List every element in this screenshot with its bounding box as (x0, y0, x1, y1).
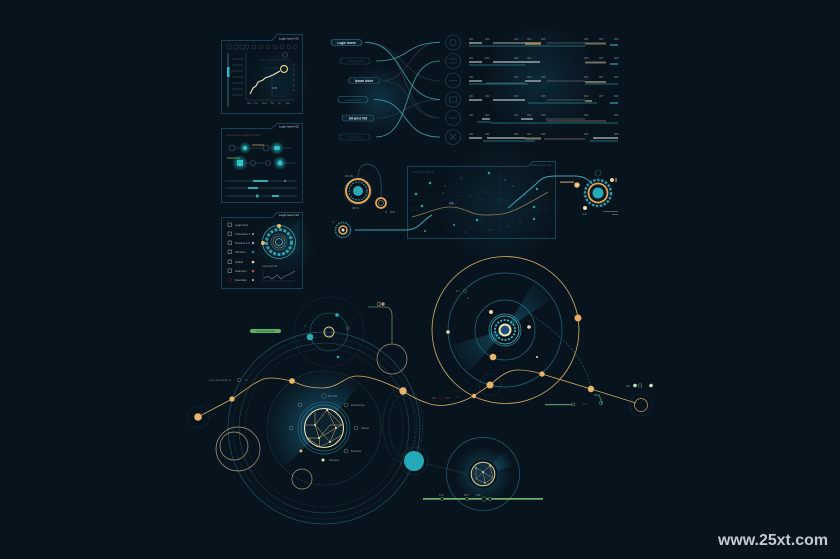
route nodes (194, 371, 594, 421)
circles: lower left (216, 427, 260, 471)
gantt labels: 002 (485, 37, 490, 41)
gantt labels (469, 37, 619, 136)
dashed ovals (383, 387, 423, 463)
tan bars (525, 44, 606, 138)
axis labels: 5 (293, 85, 295, 87)
orbit nodes (446, 310, 582, 360)
pill: fourth: Lorem 02 01 (345, 98, 361, 102)
gantt labels: 003 (514, 113, 519, 117)
label: right text (603, 211, 618, 215)
orbit labels (328, 394, 370, 462)
circle: lower (292, 469, 312, 489)
gantt labels: 002 (485, 56, 490, 60)
chart line (250, 71, 280, 94)
panel: node diagram (222, 124, 302, 202)
gantt labels: 001 (469, 37, 474, 41)
lower mid label (432, 396, 461, 400)
glowing nodes (232, 141, 287, 171)
gauge: right large (585, 170, 611, 206)
gantt labels: 001 (469, 132, 474, 136)
faint dots (442, 177, 526, 233)
gantt labels: 004 (527, 37, 532, 41)
menu list: Login form (235, 223, 249, 227)
gantt labels: 008 (614, 94, 619, 98)
radial gauge (261, 218, 300, 258)
gantt labels: 005 (541, 132, 546, 136)
panel: small bottom globe (446, 438, 520, 510)
gantt labels: 005 (541, 75, 546, 79)
green connector (368, 302, 392, 343)
orbit nodes (289, 394, 358, 462)
core gauge (489, 314, 521, 346)
axis labels: 6 (293, 90, 295, 92)
gantt labels: 005 (541, 94, 546, 98)
subtitle: Lorem ipsum dolor sit amet (226, 133, 260, 137)
axis labels: Tue (254, 103, 259, 105)
hollow nodes (229, 145, 270, 166)
node: right small: 1100 (582, 214, 588, 216)
lower right green label (545, 395, 603, 406)
gauge: lower left: 00 (332, 222, 335, 224)
list lines (232, 59, 243, 95)
menu list: Process 1.0 (235, 241, 250, 245)
panel title: Login lorem 01 (279, 36, 299, 40)
gantt labels: 007 (599, 94, 604, 98)
panel: connector flow (331, 35, 460, 144)
trend label (449, 202, 454, 204)
teal bars (469, 45, 618, 141)
list dots (252, 233, 254, 281)
axis labels: Wed (262, 103, 267, 105)
axis labels: Sat (286, 102, 290, 105)
circle icons (446, 35, 460, 144)
gantt labels: 002 (485, 113, 490, 117)
node: right orange (560, 182, 580, 188)
gantt labels: 004 (527, 113, 532, 117)
light beam (483, 451, 513, 474)
orbit labels: Preference (351, 403, 365, 407)
gauge: lower left (332, 222, 350, 238)
connector: gauges link (358, 164, 381, 197)
lower mid label: 001 (432, 398, 437, 400)
panel: line chart dashboard (222, 34, 302, 114)
orbit labels: Process (351, 449, 362, 453)
white bars (469, 43, 618, 138)
dashed link to small globe (427, 464, 468, 474)
gantt labels: 007 (599, 75, 604, 79)
node: right small (582, 178, 617, 216)
left label: 02 (245, 380, 248, 382)
gantt labels: 004 (527, 56, 532, 60)
gantt labels: 003 (514, 132, 519, 136)
gantt labels: 006 (584, 132, 589, 136)
axis labels (247, 65, 295, 105)
tan trend line (412, 192, 548, 217)
connector lines (227, 145, 295, 163)
green timeline: 00.8 (464, 495, 469, 497)
gauge: left large (344, 176, 372, 210)
gantt labels: 001 (469, 94, 474, 98)
left label (209, 378, 248, 382)
lower right green label: 1011 (582, 404, 588, 406)
gantt labels: 003 (514, 56, 519, 60)
menu list: Task item (235, 269, 247, 273)
route start halo (187, 374, 501, 428)
chart marker (280, 52, 288, 72)
orbit labels: Status (361, 426, 370, 430)
orbit labels: My Site (328, 394, 338, 398)
axis labels: 1936 (272, 88, 278, 90)
gauge: left large: 001 002 (345, 176, 354, 178)
gantt labels: 003 (514, 37, 519, 41)
top mini orbit (294, 297, 364, 367)
gantt labels: 005 (541, 37, 546, 41)
small label: 011 (456, 291, 460, 293)
faint connectors (366, 42, 440, 118)
green timeline: 0.15 (439, 495, 444, 497)
frame title: Lorem ipsum 01 (531, 163, 551, 167)
gantt labels: 002 (485, 94, 490, 98)
icon row (227, 45, 297, 49)
gantt labels: 008 (614, 132, 619, 136)
gantt labels: 003 (514, 75, 519, 79)
gantt labels: 007 (599, 37, 604, 41)
menu list: Tab item (235, 250, 246, 254)
menu list: Follow (235, 260, 244, 264)
gantt labels: 006 (584, 75, 589, 79)
green timeline (423, 495, 543, 502)
orbit rings (228, 332, 420, 524)
bright connectors (365, 42, 440, 137)
panel: top orbit system (432, 256, 591, 404)
axis labels: 4 (293, 80, 295, 82)
glow (455, 446, 511, 502)
green timeline: 0.56 (476, 495, 481, 497)
sparkline: Login lorem 03 (262, 265, 278, 268)
gantt chart rows (469, 37, 619, 141)
axis labels: 2 (293, 70, 295, 72)
watermark: www.25xt.com (717, 532, 828, 549)
panel title: Login lorem 02 (279, 124, 299, 128)
panel: gauge list (222, 212, 302, 288)
axis labels: 3 (293, 75, 295, 77)
top right legend: 016 (626, 386, 631, 388)
lower mid label: 010 (456, 397, 461, 399)
gantt labels: 006 (584, 56, 589, 60)
gantt labels: 008 (614, 75, 619, 79)
circle: upper right (377, 344, 407, 374)
gantt labels: 008 (614, 113, 619, 117)
pill: sixth: Lorem dolor (347, 135, 362, 139)
orbit labels: Process (329, 458, 340, 462)
small label (456, 290, 469, 299)
pill: Ipsum dolor: Ipsum dolor (355, 79, 374, 83)
gantt labels: 001 (469, 56, 474, 60)
panel: left orbit system (216, 297, 423, 524)
gantt labels: 006 (584, 94, 589, 98)
frame subtitle: Lorem ipsum dolor sit (412, 171, 434, 174)
network globe (304, 408, 344, 448)
gauge: small orange (376, 198, 396, 214)
gauge: small orange: 1100 (390, 212, 396, 214)
tan route line (198, 370, 636, 417)
left label: Lorem ipsum dolor sit (209, 379, 231, 382)
dashed arc (528, 312, 591, 389)
axis labels: Thu (270, 103, 275, 105)
panel: scatter plot frame (408, 162, 556, 238)
axis labels: 1 (293, 65, 295, 67)
teal line right (508, 176, 594, 208)
lower mid label: 0101 (445, 398, 451, 400)
pill: Sit amet 002: Sit amet 002 (349, 116, 368, 120)
teal rising line (355, 215, 432, 230)
gantt labels: 002 (485, 132, 490, 136)
green pill label (250, 329, 281, 333)
teal rings (448, 273, 562, 387)
menu list: Favorites (235, 278, 247, 282)
gantt labels: 001 (469, 75, 474, 79)
route end marker (630, 394, 652, 416)
gantt labels: 001 (469, 113, 474, 117)
pill: second: Lorem ipsum (347, 59, 364, 63)
outer ring (446, 438, 520, 510)
slider (227, 53, 230, 107)
menu list: Correction 1 (235, 232, 251, 236)
gantt labels: 008 (614, 37, 619, 41)
gantt labels: 005 (541, 113, 546, 117)
axis labels: Mon (247, 103, 252, 105)
grey bars (486, 43, 606, 139)
scatter dots (415, 172, 538, 232)
gantt labels: 006 (584, 37, 589, 41)
menu list (228, 223, 251, 282)
gantt labels: 004 (527, 132, 532, 136)
light wedge (452, 281, 551, 371)
teal sphere (400, 447, 428, 475)
gantt labels: 008 (614, 56, 619, 60)
gantt labels: 003 (514, 94, 519, 98)
green pill label: Lorem ipsum dolor (256, 330, 275, 333)
dashed grid lines (410, 170, 552, 235)
gantt labels: 007 (599, 56, 604, 60)
gauge: left large: 250 11 (352, 208, 360, 210)
gantt labels: 006 (584, 113, 589, 117)
panel title: Login lorem 03 (279, 213, 299, 217)
big tan ring (432, 256, 579, 404)
top right legend (626, 384, 653, 388)
gantt labels: 004 (527, 75, 532, 79)
pill: Login lorem: Login lorem (337, 41, 356, 45)
timeline bars (225, 180, 297, 198)
glow wedge (267, 371, 360, 468)
axis labels: Fri (278, 102, 281, 105)
chart axes (246, 53, 294, 100)
network globe (468, 459, 498, 489)
